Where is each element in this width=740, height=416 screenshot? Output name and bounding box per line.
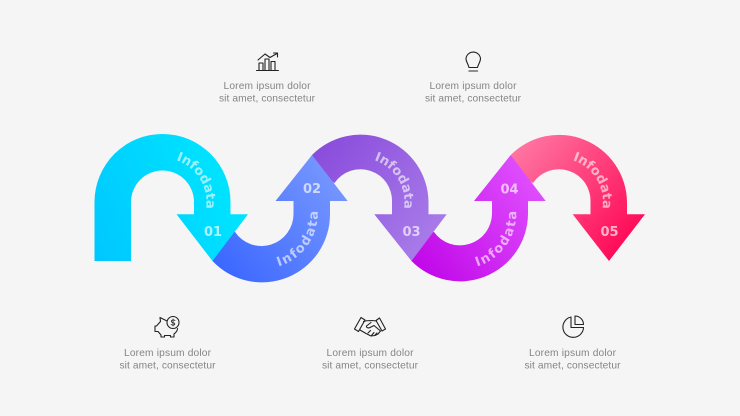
arrow segment 04: 04 <box>500 182 519 198</box>
arrow segment 01: 01 <box>204 225 222 240</box>
icon: light bulb <box>466 52 480 71</box>
caption: top right <box>425 81 522 104</box>
arrow segment 02 <box>212 155 348 282</box>
caption: bottom right <box>524 348 621 372</box>
arrow segment 01 <box>94 134 248 261</box>
caption: top right: sit amet, consectetur <box>425 94 522 104</box>
arrow segment 04 <box>411 155 546 282</box>
caption: bottom center: sit amet, consectetur <box>322 360 419 372</box>
arrow segment 05 <box>510 134 645 261</box>
caption: bottom right: Lorem ipsum dolor <box>529 348 617 359</box>
icon: pie chart <box>563 316 584 337</box>
caption: top left <box>219 81 316 104</box>
caption: top left: sit amet, consectetur <box>219 94 316 104</box>
arrow segment 03: 03 <box>402 225 421 240</box>
icon: piggy bank <box>155 316 179 337</box>
arrow segment 02: Infodata <box>276 212 318 266</box>
arrow segment 03 <box>312 134 447 261</box>
caption: bottom left: sit amet, consectetur <box>120 360 216 372</box>
caption: top left: Lorem ipsum dolor <box>224 81 311 92</box>
arrow segment 02: 02 <box>303 182 321 197</box>
caption: bottom left <box>120 348 216 372</box>
arrow segment 03: Infodata <box>375 152 414 208</box>
arrow segment 04: Infodata <box>474 212 516 266</box>
caption: bottom left: Lorem ipsum dolor <box>124 348 212 359</box>
icon: growth chart <box>256 53 278 70</box>
caption: bottom center: Lorem ipsum dolor <box>326 348 414 359</box>
icon: handshake <box>354 318 386 336</box>
arrow segment 01: Infodata <box>177 152 216 208</box>
arrow segment 05: 05 <box>600 225 619 240</box>
caption: bottom center <box>322 348 419 372</box>
arrow segment 05: Infodata <box>574 152 612 208</box>
caption: bottom right: sit amet, consectetur <box>524 360 621 372</box>
caption: top right: Lorem ipsum dolor <box>430 81 517 92</box>
